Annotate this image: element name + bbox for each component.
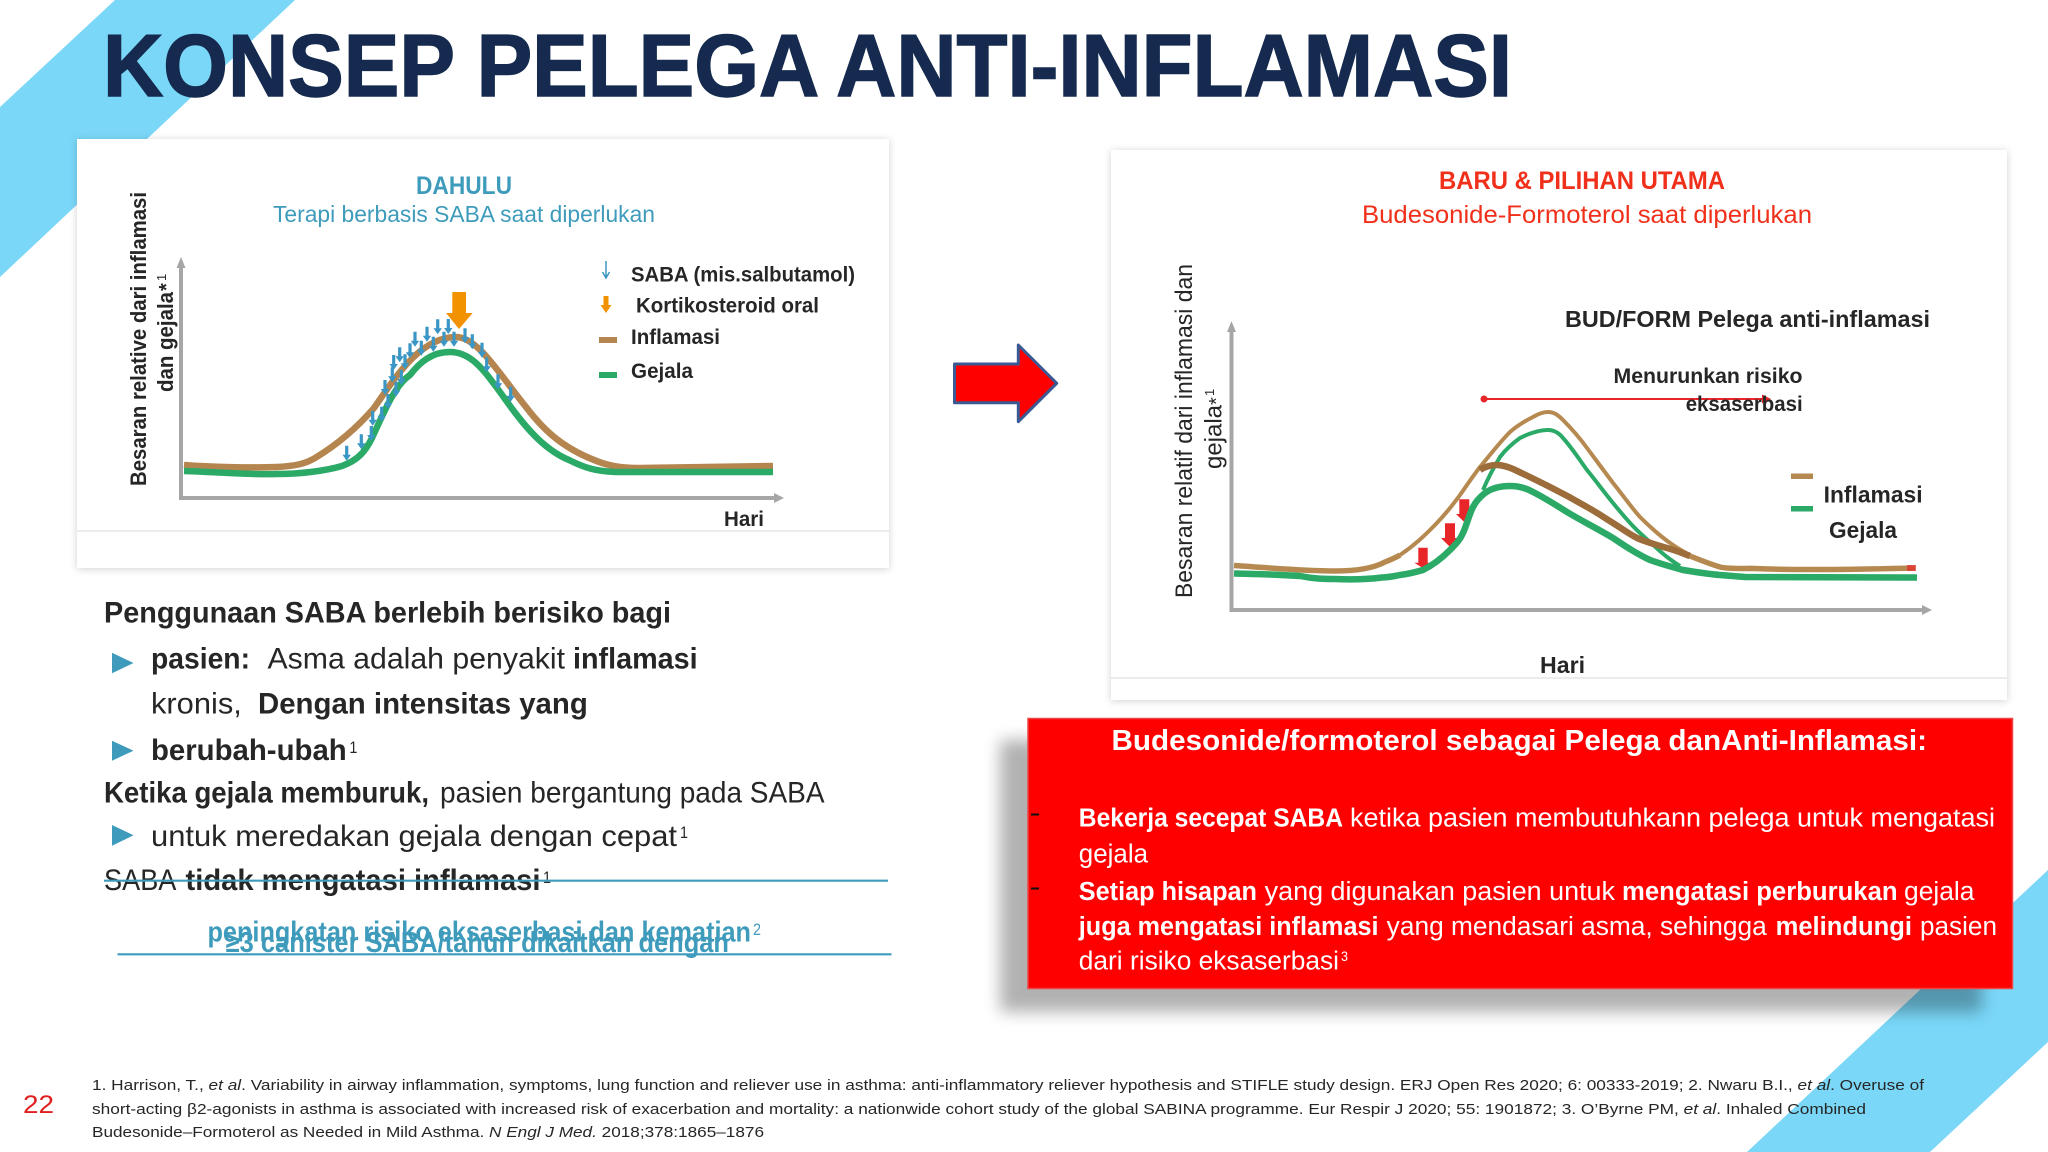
bullet dashes	[1031, 814, 1039, 890]
bullet 1 text: gejala	[1079, 841, 1149, 869]
y axis label: dan gejala	[153, 291, 178, 392]
bullet 2 text: gejala	[1904, 878, 1975, 906]
bullet 2 text	[1078, 878, 1997, 975]
line: tidak mengatasi inflamasi: 1	[543, 868, 551, 887]
callout: canister risk	[208, 917, 761, 959]
curve: inflamasi	[184, 337, 773, 468]
line: tidak mengatasi inflamasi: tidak mengatasi inflamasi	[186, 864, 540, 897]
bullet 2 text: yang mendasari asma, sehingga	[1387, 913, 1768, 941]
bullet 2 text: melindungi	[1776, 913, 1912, 941]
bullet 2	[112, 741, 134, 761]
line: kronis: kronis,	[151, 687, 242, 720]
bullet 1 text: Bekerja secepat SABA	[1079, 805, 1343, 833]
curve: inflamasi	[1234, 465, 1915, 571]
references: Budesonide–Formoterol as Needed in Mild Asthma. N Engl J Med. 2018;378:1865–1876	[92, 1124, 764, 1141]
panel: budesonide/formoterol key messages	[1000, 718, 2012, 1012]
line: asma inflamasi	[151, 642, 698, 675]
callout: canister risk: ≥3 canister SABA/tahun dikaitkan dengan	[226, 927, 729, 959]
legend	[599, 261, 855, 383]
legend: Inflamasi	[1824, 482, 1923, 508]
legend: Gejala	[1829, 517, 1897, 543]
references: 1. Harrison, T., et al . Variability in airway inflammation, symptoms, lung function and reliever use in asthma: anti-inflammatory reliever hypothesis and STIFLE study design. ERJ Open Res 2020; 6: 00333-2019; 2. Nwaru B.I., et al . Overuse of	[92, 1077, 1925, 1094]
subheading: budesonide-formoterol: Budesonide-Formoterol saat diperlukan	[1362, 201, 1812, 229]
callout: reduced exacerbation risk: Menurunkan risiko	[1614, 365, 1802, 388]
title: KONSEP PELEGA ANTI-INFLAMASI	[103, 16, 1512, 115]
y axis label: 1	[154, 274, 169, 281]
bullet 1 text	[1079, 805, 1995, 869]
bullet 3	[112, 825, 134, 846]
curve: gejala without treatment (thin)	[1483, 430, 1680, 566]
heading: baru: BARU & PILIHAN UTAMA	[1439, 167, 1725, 195]
budesonide-formoterol dose arrows	[1414, 499, 1473, 568]
callout: reduced exacerbation risk	[1480, 365, 1803, 416]
rule below callout	[118, 953, 892, 955]
line: berubah-ubah: 1	[349, 738, 357, 757]
card background	[77, 139, 889, 568]
bullet 2 text: Setiap hisapan	[1079, 878, 1257, 906]
legend: Kortikosteroid oral	[636, 295, 819, 318]
line: berubah-ubah: berubah-ubah	[151, 734, 347, 767]
x axis label: Hari	[1540, 652, 1585, 678]
line: meredakan gejala: 1	[680, 823, 688, 842]
subheading: SABA therapy: Terapi berbasis SABA saat diperlukan	[273, 201, 655, 227]
rule above callout	[104, 880, 888, 882]
curve: gejala	[184, 352, 773, 474]
bullet 2 text: yang digunakan pasien untuk	[1265, 878, 1615, 906]
callout: canister risk: peningkatan risiko eksaserbasi dan kematian	[208, 917, 751, 949]
y axis label: Besaran relatif dari inflamasi dan	[1171, 264, 1198, 598]
legend: Inflamasi	[631, 326, 720, 349]
axes	[1227, 321, 1932, 615]
y axis label: Besaran relative dari inflamasi	[126, 192, 151, 486]
line: asma inflamasi: pasien:	[151, 642, 250, 675]
box heading: Budesonide/formoterol sebagai Pelega danAnti-Inflamasi:	[1112, 725, 1927, 757]
line: ketika gejala memburuk: Ketika gejala memburuk,	[104, 777, 429, 810]
line: kronis: Dengan intensitas yang	[258, 687, 588, 720]
heading: dahulu: DAHULU	[416, 172, 512, 200]
legend	[1791, 474, 1923, 543]
callout: canister risk: 2	[753, 920, 761, 939]
callout: BUD/FORM label: BUD/FORM Pelega anti-inflamasi	[1565, 306, 1930, 332]
line: asma inflamasi: Asma adalah penyakit	[268, 642, 566, 675]
bullet 1 text: ketika pasien membutuhkann pelega untuk mengatasi	[1350, 805, 1995, 833]
line: asma inflamasi: inflamasi	[573, 642, 698, 675]
icon: orange corticosteroid arrow	[446, 292, 473, 329]
red box	[1028, 718, 2012, 988]
callout: reduced exacerbation risk: eksaserbasi	[1686, 393, 1803, 416]
curve: gejala	[1234, 486, 1917, 579]
card background	[1111, 150, 2007, 700]
y axis label: gejala	[1200, 404, 1228, 469]
text block: SABA overuse risks	[104, 597, 892, 959]
bullet 2 text: juga mengatasi inflamasi	[1078, 913, 1378, 941]
red end marker	[1907, 565, 1916, 571]
line: ketika gejala memburuk	[104, 777, 824, 810]
y axis label: 1	[1202, 389, 1217, 396]
y axis label: *	[156, 283, 178, 291]
background stripe: bottom right	[1747, 870, 2048, 1152]
background stripe: top left	[0, 0, 295, 277]
arrow: from dahulu to baru	[954, 345, 1057, 422]
legend: Gejala	[631, 360, 693, 383]
y axis label	[126, 192, 178, 486]
panel: baru (budesonide-formoterol chart)	[1111, 150, 2007, 700]
curve: inflamasi without treatment (thin)	[1400, 412, 1690, 555]
bullet 2 text: 3	[1341, 948, 1348, 964]
line: tidak mengatasi inflamasi: SABA	[104, 864, 176, 897]
line: heading: Penggunaan SABA berlebih berisiko bagi	[104, 597, 671, 630]
axes	[176, 257, 784, 503]
bullet 2 text: dari risiko eksaserbasi	[1079, 947, 1339, 975]
references: short-acting β2-agonists in asthma is associated with increased risk of exacerbation and mortality: a nationwide cohort study of the global SABINA programme. Eur Respir J 2020; 55: 1901872; 3. O’Byrne PM, et al . Inhaled Combined	[92, 1101, 1866, 1118]
references	[92, 1077, 1925, 1141]
bullet 2 text: pasien	[1920, 913, 1997, 941]
x axis label: Hari	[724, 508, 764, 531]
bullet 1	[112, 653, 134, 673]
SABA dose arrows	[342, 319, 515, 461]
line: ketika gejala memburuk: pasien bergantung pada SABA	[440, 777, 824, 810]
y axis label: *	[1206, 397, 1228, 405]
bullet 2 text: mengatasi perburukan	[1622, 878, 1898, 906]
box shadow	[1000, 740, 1982, 1012]
legend: SABA (mis.salbutamol)	[631, 264, 855, 286]
panel: dahulu (SABA chart)	[77, 139, 889, 568]
page number: 22	[23, 1091, 54, 1119]
y axis label	[1171, 264, 1228, 598]
line: meredakan gejala: untuk meredakan gejala dengan cepat	[151, 820, 678, 853]
